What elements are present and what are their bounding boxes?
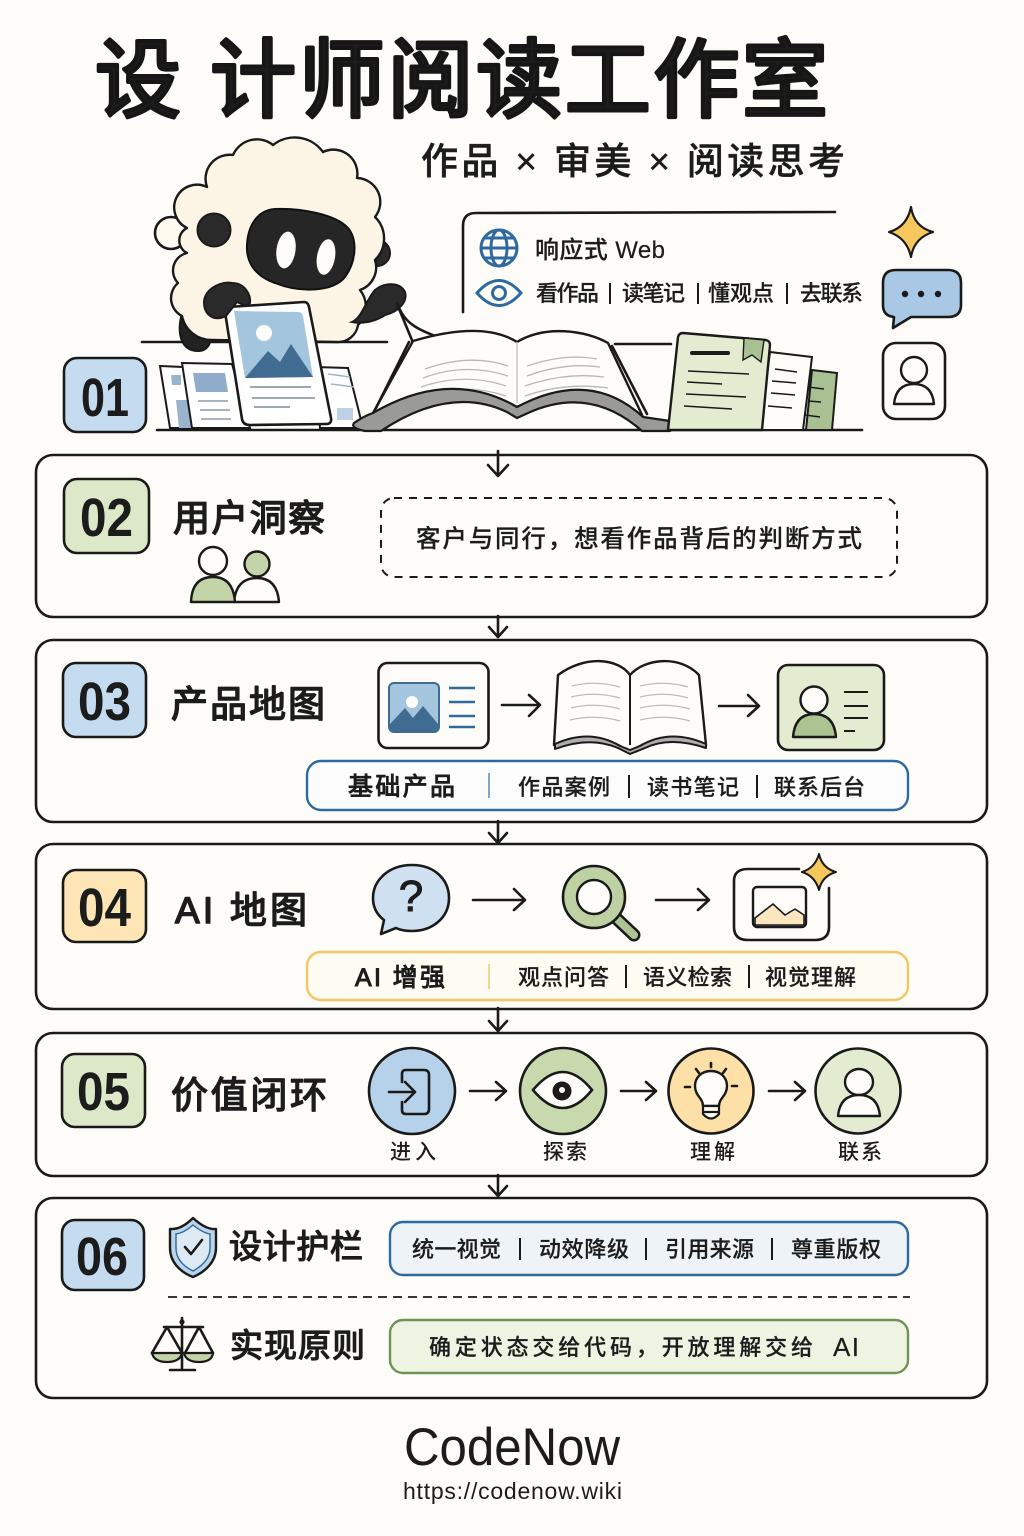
footer logo: CodeNow — [404, 1418, 621, 1477]
title: 设 计师阅读工作室 — [95, 33, 828, 129]
badge 03 — [63, 663, 146, 737]
pill: base product — [307, 761, 908, 810]
arrow — [656, 889, 709, 910]
arrow — [502, 695, 540, 716]
heading: principles: 实现原则 — [230, 1327, 365, 1364]
arrow — [470, 1082, 506, 1100]
heading: 用户洞察 — [173, 498, 325, 539]
callout: 客户与同行，想看作品背后的判断方式 — [416, 525, 862, 553]
callout — [381, 498, 897, 577]
arrow — [621, 1082, 656, 1100]
step: contact — [816, 1048, 900, 1164]
step: understand: 理解 — [690, 1141, 735, 1164]
pill: base product: 联系后台 — [774, 775, 865, 800]
panel: 03 product map — [36, 640, 987, 822]
arrow — [473, 889, 525, 910]
text: actions: 懂观点 — [708, 281, 774, 306]
panel: 04 AI map — [36, 844, 987, 1009]
icon: document stack — [160, 363, 363, 428]
badge 02 — [64, 479, 149, 553]
arrow — [769, 1082, 805, 1100]
pill: AI enhanced: 视觉理解 — [765, 965, 856, 990]
pill: guardrails: 引用来源 — [665, 1237, 754, 1262]
icon: chat bubble — [883, 270, 961, 328]
icon: eye — [477, 280, 521, 306]
pill: AI enhanced: AI 增强 — [355, 964, 445, 992]
icon: sparkle — [889, 207, 933, 257]
arrow — [719, 695, 759, 716]
text: actions: 看作品 — [536, 281, 599, 306]
panel: 02 user insight — [36, 455, 987, 617]
pill: guardrails: 统一视觉 — [412, 1237, 501, 1262]
icon: tablet with picture — [225, 302, 331, 425]
step: contact: 联系 — [838, 1141, 882, 1164]
step: enter — [369, 1048, 455, 1164]
text: responsive web: 响应式 Web — [535, 237, 665, 264]
text: actions: 去联系 — [800, 281, 863, 306]
icon: notes — [668, 333, 837, 430]
pill: principles: AI — [833, 1332, 859, 1362]
pill: AI enhanced: 观点问答 — [518, 965, 609, 990]
step: understand — [668, 1048, 754, 1164]
icon: globe — [481, 230, 517, 266]
arrows between panels — [488, 451, 508, 1196]
badge 06: 06 — [76, 1227, 128, 1287]
subtitle: 作品 × 审美 × 阅读思考 — [421, 141, 845, 182]
icon: open book small — [554, 661, 706, 754]
step: explore — [520, 1048, 606, 1164]
pill: AI enhanced: 语义检索 — [643, 965, 732, 990]
icon: shield — [170, 1218, 216, 1277]
icon: picture with sparkle — [734, 854, 836, 940]
icon: open book — [353, 331, 670, 431]
badge 04 — [63, 870, 146, 942]
footer url: https://codenow.wiki — [403, 1478, 622, 1504]
text: actions: 读笔记 — [622, 281, 685, 306]
badge 04: 04 — [78, 878, 131, 938]
panel: 05 value loop — [36, 1033, 987, 1176]
pill: AI enhanced — [307, 952, 908, 1000]
heading: AI 地图 — [175, 890, 307, 931]
icon: question bubble: ? — [399, 872, 423, 921]
icon: profile — [883, 343, 945, 419]
heading: guardrails: 设计护栏 — [229, 1228, 363, 1265]
icon: sheep mascot — [155, 138, 440, 358]
text: actions — [536, 281, 863, 306]
badge 05: 05 — [77, 1062, 130, 1122]
icon: question bubble — [373, 865, 449, 934]
badge 06 — [62, 1220, 144, 1290]
icon: contact card — [778, 665, 884, 750]
hero baseline — [142, 342, 862, 430]
step: enter: 进入 — [390, 1141, 436, 1164]
pill: base product: 作品案例 — [518, 775, 610, 800]
icon: scales — [152, 1318, 213, 1370]
panel: 06 guardrails — [36, 1198, 987, 1398]
badge 05 — [62, 1054, 145, 1127]
pill: guardrails — [390, 1222, 908, 1275]
badge 01 — [64, 358, 146, 432]
icon: magnifier — [563, 866, 634, 935]
pill: guardrails: 尊重版权 — [791, 1237, 881, 1262]
heading: 产品地图 — [171, 684, 325, 725]
icon: paw on tablet — [204, 283, 250, 318]
pill: base product: 基础产品 — [348, 773, 455, 801]
panel: hero info — [463, 212, 863, 312]
icon: users — [191, 547, 279, 602]
pill: principles: 确定状态交给代码，开放理解交给 — [429, 1335, 813, 1360]
pill: principles — [390, 1320, 908, 1373]
badge 01: 01 — [81, 368, 129, 428]
icon: picture card — [378, 663, 488, 748]
heading: 价值闭环 — [171, 1075, 327, 1116]
badge 03: 03 — [78, 672, 131, 732]
pill: base product: 读书笔记 — [647, 775, 739, 800]
badge 02: 02 — [80, 488, 133, 548]
step: explore: 探索 — [543, 1141, 587, 1164]
pill: guardrails: 动效降级 — [539, 1237, 629, 1262]
